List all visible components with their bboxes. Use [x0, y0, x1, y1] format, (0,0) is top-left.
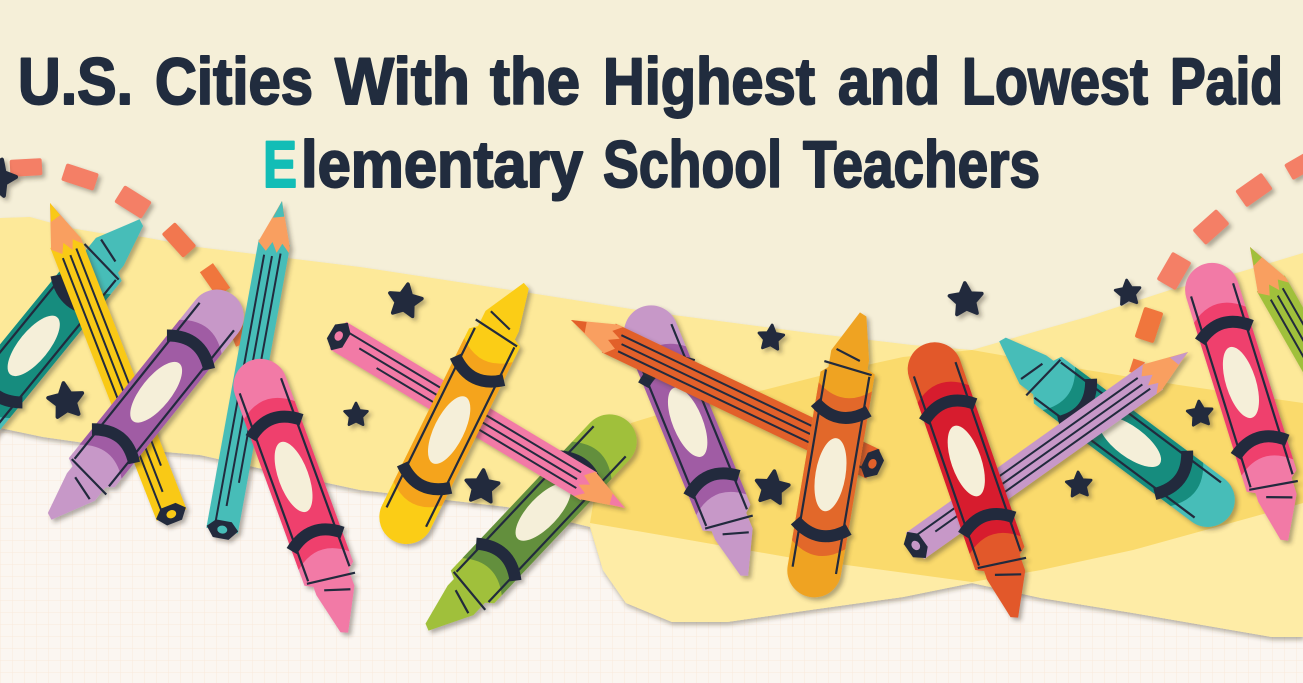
crayon: yellow [370, 270, 546, 553]
background: grid paper [0, 420, 1303, 683]
crayon: teal left [0, 201, 159, 459]
crayon: pink [226, 351, 375, 641]
dashed path: right [1129, 153, 1303, 376]
stars [0, 155, 1213, 504]
title: E [263, 127, 297, 201]
title [18, 44, 1283, 201]
crayon: green [410, 403, 648, 651]
pencil: orange [564, 306, 887, 482]
crayon: purple left [32, 279, 255, 538]
pencil: purple [899, 339, 1197, 564]
pencil: pink [323, 318, 633, 522]
pencil: yellow [35, 197, 190, 528]
title: lementary [301, 127, 583, 201]
title: School [603, 127, 782, 201]
title: Highest [603, 44, 815, 118]
title: U.S. [18, 44, 133, 118]
background: darker yellow blob [590, 350, 1303, 582]
crayon: red [900, 335, 1046, 626]
title: the [490, 44, 580, 118]
title: Teachers [803, 127, 1040, 201]
title: Cities [155, 44, 313, 118]
pencil: green [1236, 239, 1303, 553]
crayon: orange [783, 307, 885, 601]
crayon: teal right [982, 321, 1246, 538]
background: torn yellow paper band [0, 217, 1303, 637]
dashed path: left [10, 158, 249, 347]
pencil: teal [205, 198, 298, 541]
background: lighter torn paper area [590, 503, 1303, 637]
crayon: pink right [1178, 256, 1303, 548]
title: and [838, 44, 940, 118]
crayon: purple middle [616, 297, 775, 585]
title: With [335, 44, 470, 118]
title: Lowest [962, 44, 1148, 118]
